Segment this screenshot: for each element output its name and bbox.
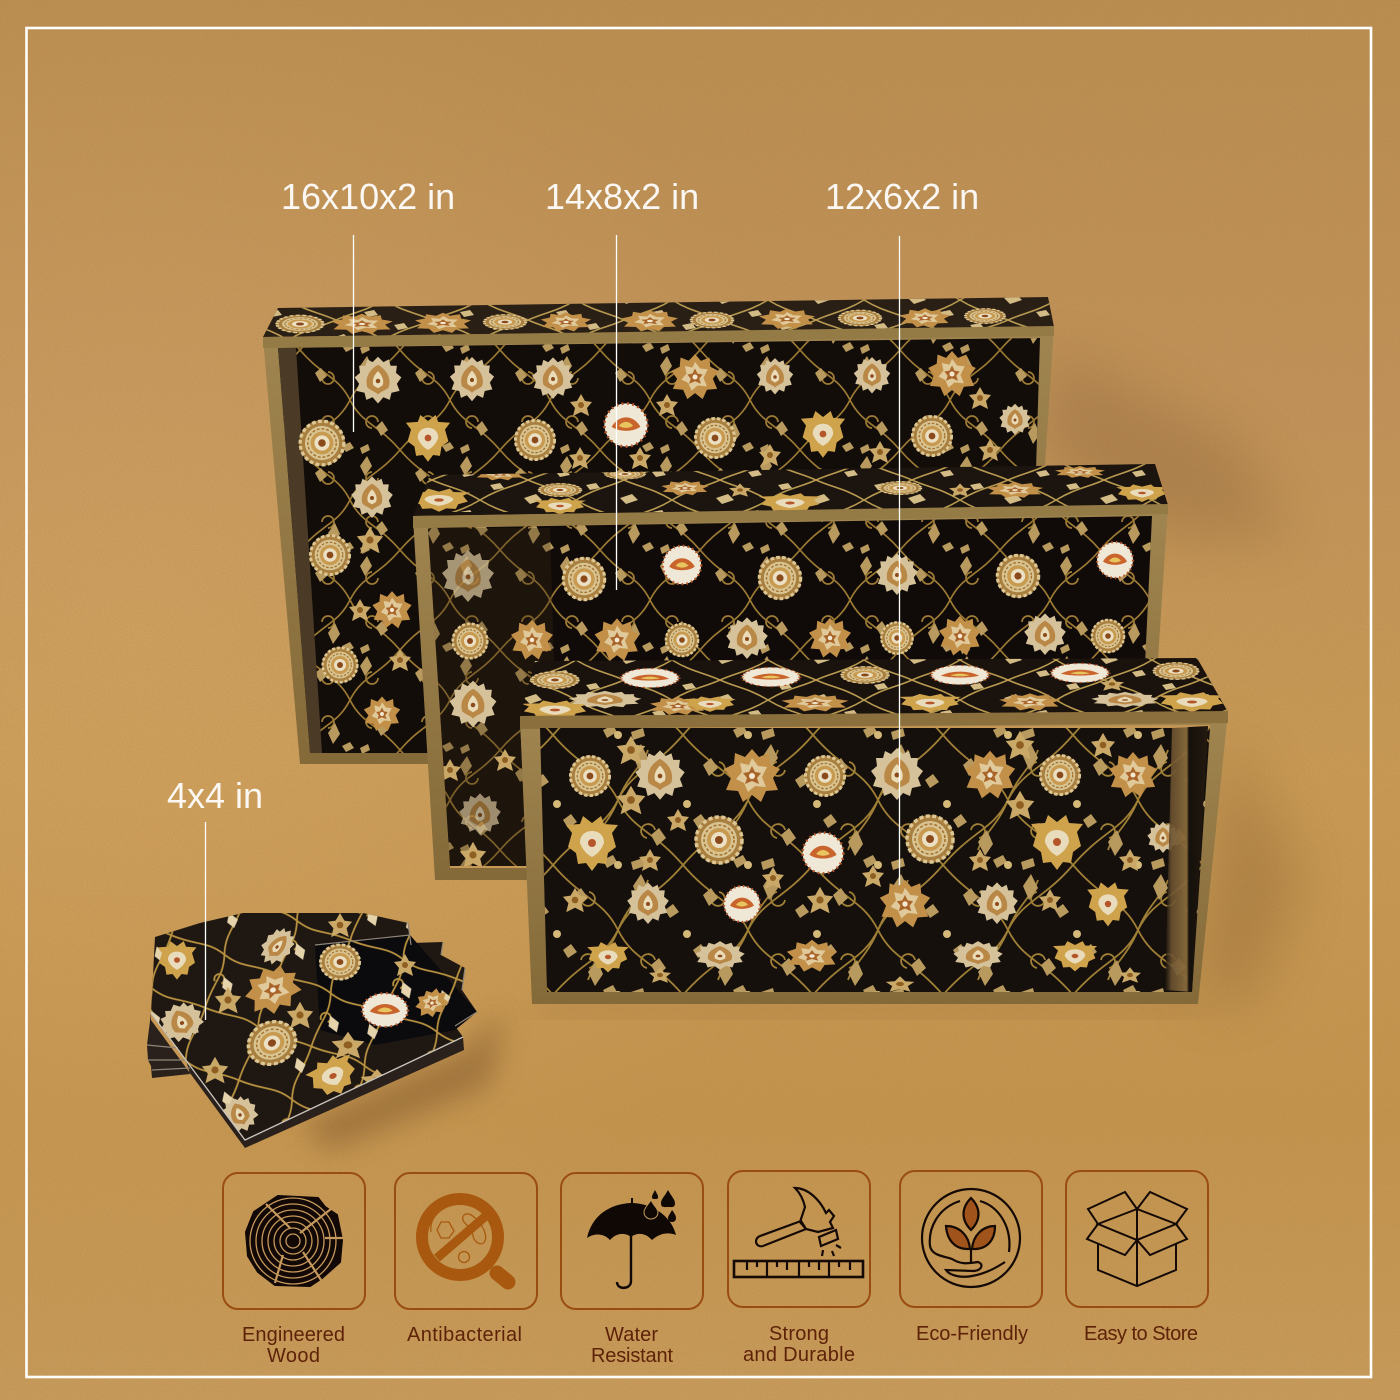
icon: magnifier with bacteria — [422, 1199, 508, 1282]
label — [242, 1324, 345, 1367]
label: Eco-Friendly — [916, 1323, 1028, 1345]
size label 16x10x2 in: 16x10x2 in — [281, 176, 455, 217]
feature: engineered wood — [223, 1173, 365, 1367]
coaster motifs — [151, 913, 463, 1131]
icon box — [728, 1171, 870, 1307]
medium tray rim motifs — [408, 462, 1170, 514]
label: Strong — [769, 1323, 829, 1345]
small tray outer wood frame — [520, 712, 1228, 1004]
size label 4x4 in: 4x4 in — [167, 775, 263, 816]
small tray glass side wall — [1165, 726, 1208, 992]
coaster glossy top tile — [315, 935, 477, 1045]
large tray rim motifs — [266, 298, 1050, 337]
feature: antibacterial — [395, 1173, 537, 1346]
feature: easy to store — [1066, 1171, 1208, 1345]
large tray interior motifs — [278, 338, 1048, 758]
label: Wood — [267, 1345, 320, 1367]
icon: wood rings — [246, 1196, 343, 1286]
icon box — [900, 1171, 1042, 1307]
icon box — [223, 1173, 365, 1309]
label: Easy to Store — [1084, 1323, 1198, 1345]
large tray interior print — [278, 338, 1040, 753]
medium tray outer wood frame — [413, 505, 1168, 880]
label: Resistant — [591, 1345, 673, 1367]
large tray rim front edge — [263, 326, 1054, 348]
small tray 12x6x2 — [520, 656, 1230, 1004]
label — [743, 1323, 855, 1366]
icon: hammer and ruler — [734, 1188, 863, 1277]
small tray rim print — [520, 658, 1228, 716]
small tray interior print — [540, 728, 1210, 992]
large tray outer wood frame — [263, 327, 1054, 764]
coaster stack silhouette — [151, 913, 477, 1140]
feature: strong and durable — [728, 1171, 870, 1366]
medium tray interior print — [428, 516, 1152, 866]
label: Engineered — [242, 1324, 345, 1346]
medium tray rim print — [413, 464, 1168, 516]
icon box — [1066, 1171, 1208, 1307]
small tray rim front edge — [520, 711, 1228, 729]
small tray rim motifs — [520, 656, 1230, 720]
label — [591, 1324, 673, 1367]
feature: eco-friendly — [900, 1171, 1042, 1345]
soft tray shadows — [300, 350, 1300, 1150]
large tray 16x10x2 — [260, 295, 1060, 764]
coaster stack layer lines — [147, 923, 477, 1070]
large tray rim print — [263, 297, 1054, 337]
label: Antibacterial — [407, 1324, 522, 1346]
icon box — [561, 1173, 703, 1309]
small tray interior motifs — [540, 725, 1210, 995]
icon box — [395, 1173, 537, 1309]
medium tray 14x8x2 — [408, 462, 1170, 880]
coaster stack 4x4 — [140, 905, 485, 1150]
icon: umbrella with rain — [587, 1190, 676, 1288]
coaster front edge highlight — [151, 1013, 463, 1140]
medium tray rim front edge — [413, 504, 1168, 528]
coaster stack edges — [147, 1013, 464, 1148]
size label 12x6x2 in: 12x6x2 in — [825, 176, 979, 217]
icon: open box — [1087, 1192, 1187, 1286]
icon: plant in hand — [922, 1189, 1020, 1287]
medium tray interior motifs — [428, 516, 1158, 876]
feature: water resistant — [561, 1173, 703, 1367]
label: Water — [605, 1324, 658, 1346]
size label 14x8x2 in: 14x8x2 in — [545, 176, 699, 217]
label: and Durable — [743, 1344, 855, 1366]
